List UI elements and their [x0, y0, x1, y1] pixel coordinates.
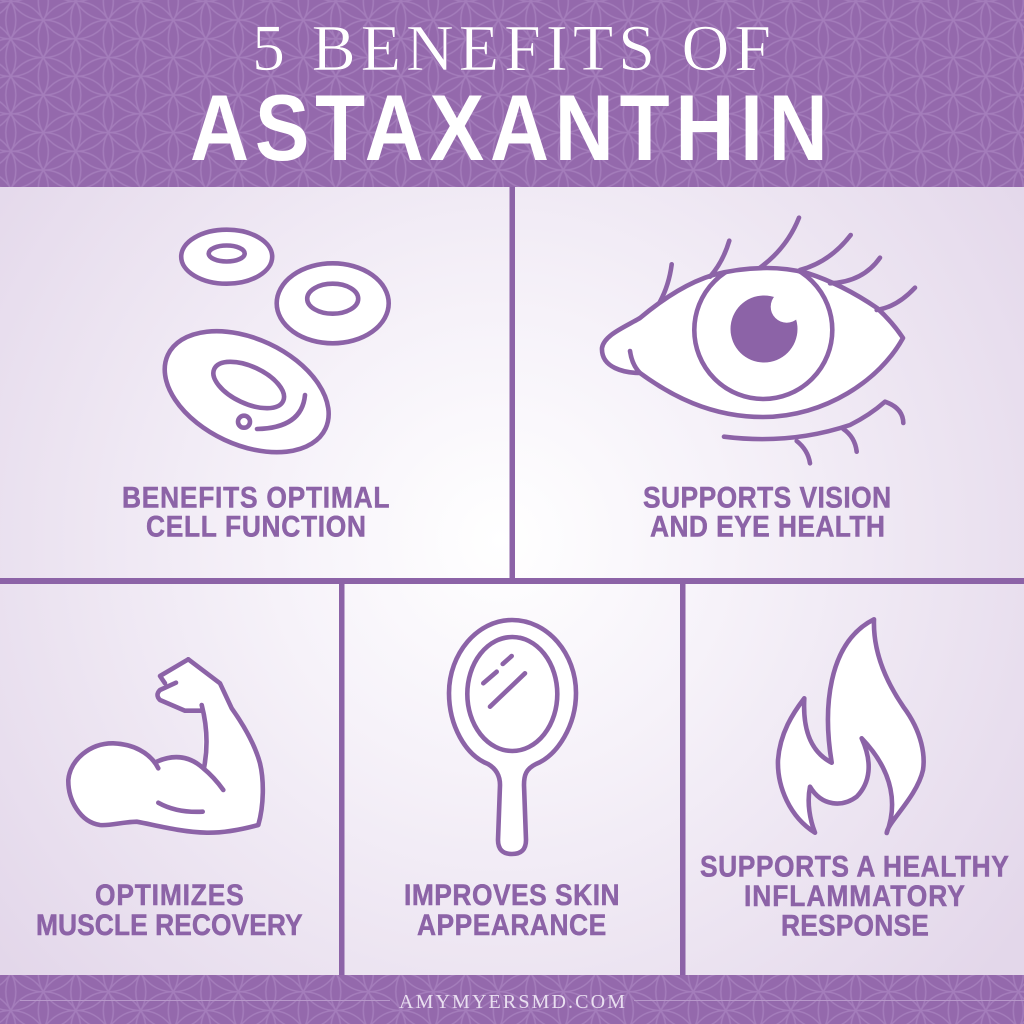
label: inflammatory response: INFLAMMATORY: [744, 878, 965, 912]
label: vision: AND EYE HEALTH: [650, 509, 885, 543]
footer text: AMYMYERSMD.COM: [399, 991, 625, 1013]
label: vision: [643, 480, 891, 543]
label: inflammatory response: [700, 849, 1009, 942]
icon: eye: [602, 218, 915, 463]
panel: skin appearance: [404, 620, 620, 941]
icon: flame: [778, 619, 924, 833]
label: muscle recovery: [36, 877, 303, 941]
label: inflammatory response: SUPPORTS A HEALTHY: [700, 849, 1009, 883]
label: skin appearance: APPEARANCE: [417, 907, 606, 941]
label: inflammatory response: RESPONSE: [781, 908, 929, 942]
panel dividers: [0, 187, 1024, 975]
panel: inflammatory response: [700, 619, 1009, 942]
title: [190, 12, 828, 180]
label: vision: SUPPORTS VISION: [643, 480, 891, 514]
label: cell function: [122, 480, 390, 543]
icon: hand mirror: [449, 620, 576, 854]
label: skin appearance: [404, 877, 620, 941]
label: cell function: CELL FUNCTION: [146, 509, 366, 543]
label: cell function: BENEFITS OPTIMAL: [122, 480, 390, 514]
label: muscle recovery: OPTIMIZES: [95, 877, 244, 911]
label: muscle recovery: MUSCLE RECOVERY: [36, 907, 303, 941]
panels background: [0, 187, 1024, 975]
title line: 5 benefits of: 5 BENEFITS OF: [252, 12, 771, 85]
panel: cell function: [122, 230, 390, 543]
panel: muscle recovery: [36, 659, 303, 941]
footer band: [0, 975, 1024, 1024]
title line: astaxanthin: ASTAXANTHIN: [190, 75, 828, 180]
label: skin appearance: IMPROVES SKIN: [404, 877, 620, 911]
icon: flexed arm: [68, 659, 263, 833]
icon: cells: [145, 230, 389, 477]
panel: vision: [602, 218, 915, 543]
header band: [0, 0, 1024, 187]
